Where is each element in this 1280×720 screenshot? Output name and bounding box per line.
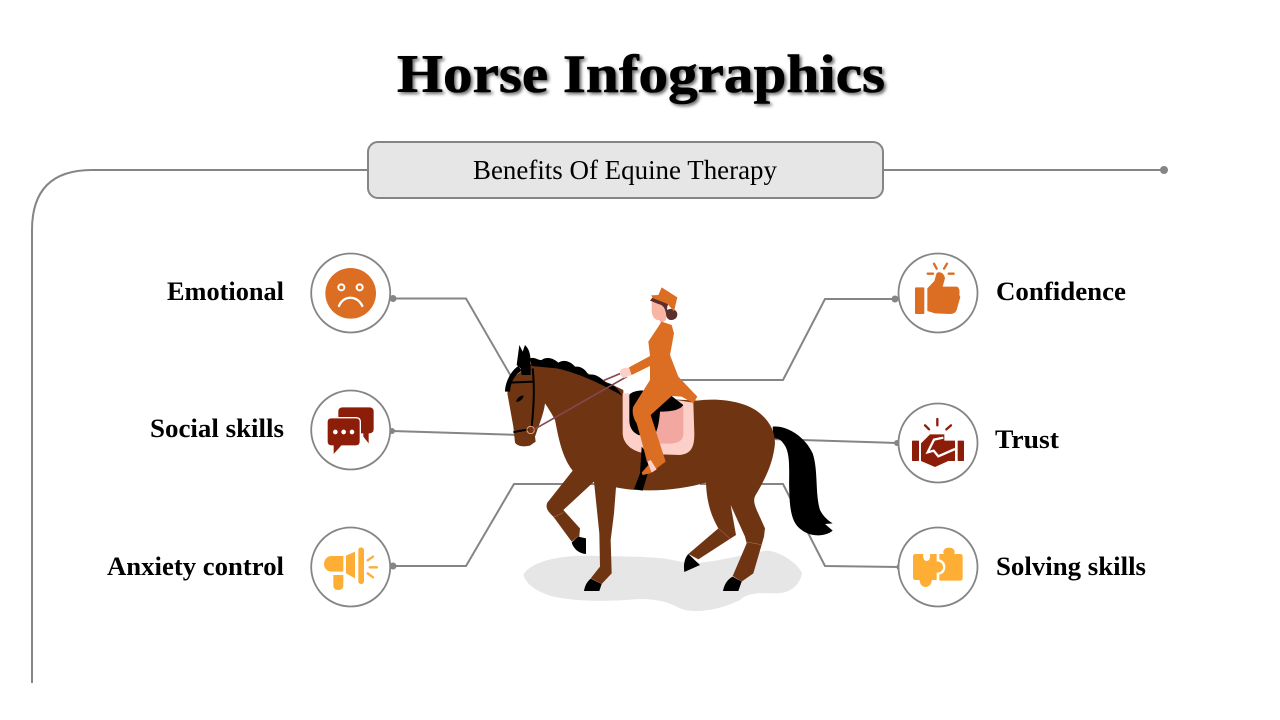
icon: puzzle pieces (913, 548, 963, 587)
stirrup strap (642, 438, 647, 462)
item: Anxiety control (107, 528, 390, 606)
leg highlights (553, 513, 763, 584)
subtitle box: Benefits Of Equine Therapy (473, 155, 777, 185)
subtitle box (368, 142, 883, 198)
reins (534, 373, 627, 429)
horse tail (773, 427, 833, 535)
title: Horse Infographics (397, 44, 885, 104)
icon: sad face (325, 268, 376, 319)
bit ring (527, 426, 534, 434)
saddle (629, 391, 683, 437)
mane (530, 358, 623, 396)
horse and rider illustration (505, 287, 833, 611)
hooves (572, 537, 742, 591)
icon ring: Confidence (898, 254, 978, 332)
icon: handshake (912, 419, 964, 467)
label: Trust: Trust (995, 425, 1059, 454)
inner pad (647, 407, 683, 444)
forelock (505, 366, 522, 392)
label: Solving skills: Solving skills (996, 552, 1146, 581)
item: Trust (898, 404, 1059, 482)
rider neck and face (652, 302, 668, 323)
girth (634, 447, 650, 491)
icon ring: Social skills (311, 390, 390, 470)
rider hair (650, 297, 677, 320)
saddle pad (623, 393, 694, 455)
rider foot strap (647, 460, 657, 473)
icon ring: Anxiety control (311, 528, 390, 606)
frame line (32, 170, 368, 683)
ground shadow (523, 551, 802, 611)
bridle (509, 368, 534, 432)
eye (516, 396, 524, 402)
rider hand (620, 368, 632, 378)
icon: thumbs up (915, 264, 960, 314)
rider hat (651, 287, 677, 312)
ears (517, 345, 531, 375)
label: Anxiety control: Anxiety control (107, 552, 284, 581)
head details (505, 345, 627, 434)
icon ring: Emotional (311, 254, 390, 332)
label: Emotional: Emotional (167, 277, 284, 306)
rider body (629, 322, 697, 475)
label: Confidence: Confidence (996, 277, 1126, 306)
item: Emotional (167, 254, 390, 332)
saddle and rider (620, 287, 697, 491)
icon ring: Solving skills (898, 528, 978, 606)
icon: megaphone (324, 547, 377, 590)
horse body (507, 363, 775, 584)
item: Social skills (150, 390, 390, 470)
subtitle line with end dot (883, 166, 1168, 174)
label: Social skills: Social skills (150, 414, 284, 443)
item: Solving skills (898, 528, 1146, 606)
item: Confidence (898, 254, 1126, 332)
icon ring: Trust (898, 404, 978, 482)
connector lines (389, 295, 904, 570)
icon: chat bubbles (327, 407, 374, 456)
